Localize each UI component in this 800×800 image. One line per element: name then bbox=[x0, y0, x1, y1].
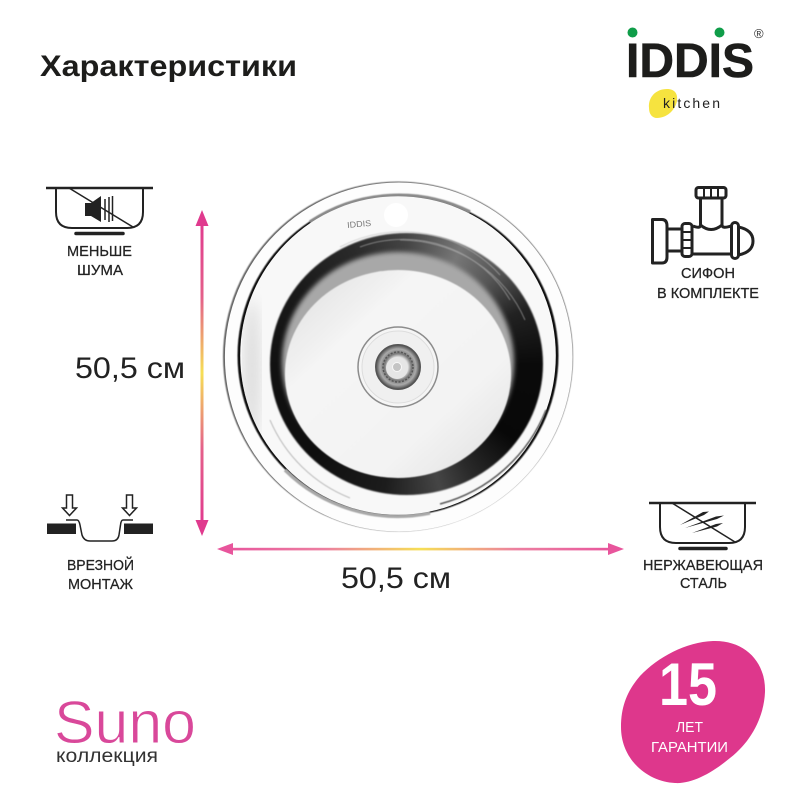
steel icon sink outline bbox=[649, 503, 756, 548]
badge caption: ГАРАНТИИ bbox=[651, 739, 728, 756]
badge caption: ЛЕТ bbox=[676, 719, 703, 736]
logo: iddis kitchen bbox=[626, 26, 764, 118]
logo registered mark: ® bbox=[754, 26, 764, 41]
label: siphon included: СИФОН bbox=[681, 265, 735, 282]
title: Характеристики bbox=[40, 50, 297, 83]
label: inset mounting: ВРЕЗНОЙ bbox=[67, 556, 134, 574]
label: inset mounting bbox=[67, 556, 134, 593]
collection title: Suno bbox=[54, 689, 196, 756]
arrow: height bbox=[196, 210, 208, 536]
sink bowl bbox=[270, 233, 543, 495]
label: less noise: ШУМА bbox=[77, 262, 123, 279]
logo kitchen word: kitchen bbox=[663, 95, 720, 111]
arrow: width bbox=[217, 543, 624, 555]
label: stainless steel: СТАЛЬ bbox=[680, 575, 727, 592]
icon: inset mounting bbox=[47, 495, 153, 541]
label: siphon included bbox=[657, 265, 759, 302]
dimension: height value: 50,5 см bbox=[75, 352, 185, 385]
collection name bbox=[54, 689, 196, 767]
sink floor, drain and logo: IDDIS bbox=[347, 218, 372, 230]
dimension: width value: 50,5 см bbox=[341, 562, 451, 595]
label: inset mounting: МОНТАЖ bbox=[68, 576, 133, 593]
label: stainless steel bbox=[643, 557, 763, 592]
mounting icon arrows bbox=[62, 495, 136, 516]
noise icon speaker bbox=[85, 196, 112, 222]
collection caption: коллекция bbox=[56, 745, 158, 767]
badge: 15 years warranty bbox=[621, 641, 765, 783]
badge number: 15 bbox=[659, 651, 717, 718]
noise icon sink outline bbox=[46, 188, 153, 234]
mounting icon sink profile bbox=[66, 520, 133, 541]
icon: stainless steel bbox=[649, 503, 756, 548]
label: siphon included: В КОМПЛЕКТЕ bbox=[657, 285, 759, 302]
mounting icon countertop bbox=[47, 524, 153, 534]
icon: siphon included bbox=[652, 188, 753, 263]
steel icon scratches bbox=[680, 512, 724, 533]
badge blob bbox=[621, 641, 765, 783]
sink photo bbox=[222, 180, 574, 532]
logo wordmark: IDDIS bbox=[626, 35, 754, 88]
label: less noise: МЕНЬШЕ bbox=[67, 243, 132, 260]
logo yellow spot bbox=[649, 89, 677, 118]
icon: less noise bbox=[46, 188, 153, 234]
sink rim bbox=[222, 180, 574, 532]
label: stainless steel: НЕРЖАВЕЮЩАЯ bbox=[643, 557, 763, 574]
badge caption bbox=[651, 719, 728, 756]
logo green dots bbox=[628, 28, 724, 38]
label: less noise bbox=[67, 243, 132, 279]
